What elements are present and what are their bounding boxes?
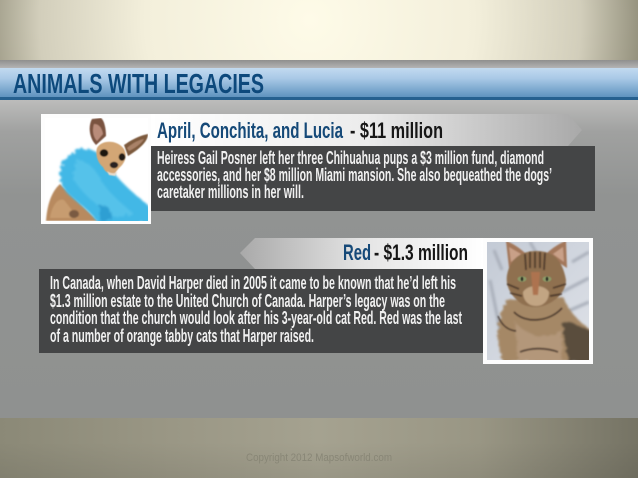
bottom khaki footer band: [0, 418, 638, 478]
description text: of a number of orange tabby cats that Harper raised.: [50, 326, 314, 346]
panel: April, Conchita and Lucia: [41, 114, 595, 224]
heading arrow: [240, 238, 483, 269]
title banner: [0, 68, 638, 100]
main grey background panel: [0, 60, 638, 418]
dog ears: [90, 118, 106, 145]
cat head: [506, 241, 567, 307]
cat photo frame: [483, 238, 593, 364]
title: ANIMALS WITH LEGACIES: [13, 68, 264, 99]
cat markings: [498, 252, 566, 352]
boa: [60, 149, 152, 224]
dog eyes and nose: [100, 149, 108, 157]
heading arrow: [151, 114, 582, 146]
copyright footer: Copyright 2012 Mapsofworld.com: [246, 452, 392, 464]
top cream background band: [0, 0, 638, 60]
dog head: [96, 142, 126, 174]
dog body: [46, 184, 98, 221]
heading amount: - $11 million: [350, 118, 443, 143]
heading name: Red: [343, 240, 371, 265]
dog photo frame: [41, 114, 151, 224]
cat eyes: [518, 276, 552, 282]
description box: [151, 146, 595, 211]
panel: Red: [39, 238, 593, 364]
description text: caretaker millions in her will.: [157, 182, 304, 202]
description box: [39, 269, 483, 353]
description text: [50, 273, 462, 346]
description text: [157, 148, 552, 202]
heading amount: - $1.3 million: [374, 240, 468, 265]
background folds: [490, 242, 589, 330]
icon: tabby cat: [487, 241, 592, 362]
cat body: [498, 296, 592, 362]
icon: chihuahua in blue boa: [45, 118, 152, 224]
heading text: April, Conchita, and Lucia: [157, 118, 344, 143]
